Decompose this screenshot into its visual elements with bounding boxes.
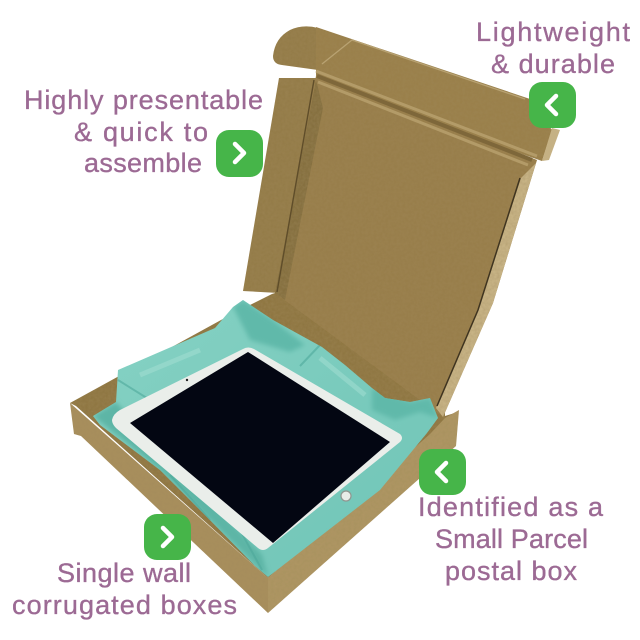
base right outer wall <box>268 410 459 613</box>
badge: left chevron <box>419 449 466 495</box>
callout: single wall corrugated: Single wall <box>57 558 191 588</box>
callout: highly presentable: assemble <box>84 148 202 178</box>
tablet camera <box>186 379 188 381</box>
tissue shadow upper fold <box>233 300 305 352</box>
lid left shadow <box>275 80 323 300</box>
box base <box>70 285 459 613</box>
callout: single wall corrugated <box>12 514 237 620</box>
tablet <box>112 348 402 550</box>
lid right tab <box>542 128 560 161</box>
callout: highly presentable <box>24 85 263 178</box>
tissue shadow right fold <box>372 388 438 420</box>
badge: left chevron <box>529 82 576 128</box>
base left outer wall <box>70 403 268 613</box>
callout: identified as small parcel: postal box <box>445 556 578 586</box>
callout: lightweight and durable: Lightweight <box>476 17 630 47</box>
lid right edge <box>436 163 536 417</box>
tissue paper <box>93 300 438 577</box>
lid top flap <box>316 27 552 161</box>
callout: lightweight and durable <box>476 17 630 128</box>
tablet home button <box>341 491 351 501</box>
callout: single wall corrugated: corrugated boxes <box>12 590 237 620</box>
badge: right chevron <box>144 514 191 560</box>
tissue shadow lower left <box>93 402 268 577</box>
open box <box>70 26 560 613</box>
tablet screen <box>130 352 390 543</box>
callout: lightweight and durable: & durable <box>491 49 615 79</box>
lid main panel <box>275 76 537 417</box>
callout: identified as small parcel: Identified as a <box>418 492 604 522</box>
lid left side flap <box>243 78 318 293</box>
callout: highly presentable: & quick to <box>74 117 208 147</box>
lid tuck tab <box>273 26 318 70</box>
callout: identified as small parcel: Small Parcel <box>435 524 588 554</box>
box lid <box>243 26 552 417</box>
callout: highly presentable: Highly presentable <box>24 85 263 115</box>
base back inner wall <box>70 285 458 578</box>
callout: identified as small parcel <box>418 449 604 586</box>
tablet body <box>112 348 402 550</box>
lid crease lines <box>316 71 537 165</box>
tissue folds <box>118 345 320 570</box>
badge: right chevron <box>216 130 263 177</box>
tissue crumple shading <box>93 300 438 577</box>
